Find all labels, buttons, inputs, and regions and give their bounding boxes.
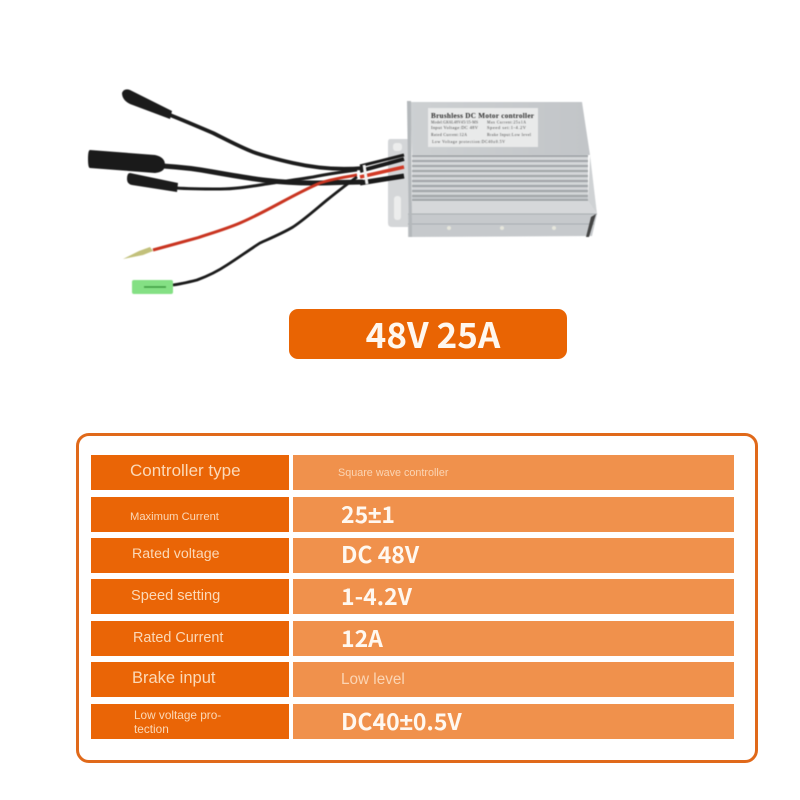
value: 1-4.2V [293, 579, 734, 614]
row: Low voltage protection: tection [134, 722, 169, 736]
banner: 48V 25A: 48V 25A [366, 308, 500, 359]
row: Low voltage protection: Low voltage pro- [134, 708, 221, 722]
icon: lower connector cable [127, 170, 357, 192]
icon: cable bundle entering controller [360, 155, 404, 184]
spec label on housing: Max Current:25±1A [487, 120, 526, 124]
spec label on housing: Low Voltage protection:DC40±0.5V [432, 139, 505, 144]
spec label on housing [428, 108, 538, 147]
spec label on housing: Brushless DC Motor controller [431, 112, 535, 120]
value: DC 48V: DC 48V [341, 536, 419, 570]
row: Controller type [91, 455, 289, 490]
value: Square wave controller [293, 455, 734, 490]
row: Rated voltage [91, 538, 289, 573]
row: Maximum Current: Maximum Current [130, 511, 219, 523]
banner: 48V 25A [289, 309, 567, 359]
row: Brake input: Brake input [132, 669, 215, 687]
value: 12A: 12A [341, 620, 383, 654]
spec label on housing: Brake Input:Low level [487, 132, 532, 137]
row: Controller type: Controller type [130, 461, 241, 480]
row: Rated voltage: Rated voltage [132, 546, 220, 562]
icon: black wire with green connector [132, 177, 357, 294]
icon: middle connector cable [88, 150, 363, 183]
icon: top connector cable [122, 89, 363, 169]
value: 25±1: 25±1 [341, 496, 395, 530]
value: DC 48V [293, 538, 734, 573]
value: 1-4.2V: 1-4.2V [341, 578, 412, 612]
icon: controller housing [407, 101, 597, 237]
row: Rated Current [91, 621, 289, 656]
value: 12A [293, 621, 734, 656]
spec label on housing: Input Voltage:DC 48V [431, 125, 479, 130]
value: Low level: Low level [341, 671, 405, 688]
icon: mounting bracket [388, 139, 410, 227]
row: Low voltage protection [91, 704, 289, 739]
spec label on housing: Speed set:1-4.2V [487, 125, 527, 130]
row: Speed setting [91, 579, 289, 614]
row: Maximum Current [91, 497, 289, 532]
value: DC40±0.5V [293, 704, 734, 739]
row: Rated Current: Rated Current [133, 630, 223, 646]
spec label on housing: Rated Current:12A [431, 132, 467, 137]
panel: specification table frame [76, 433, 758, 763]
icon: red wire with terminal [123, 175, 357, 259]
row: Speed setting: Speed setting [131, 588, 220, 604]
value: DC40±0.5V: DC40±0.5V [341, 703, 462, 737]
value: 25±1 [293, 497, 734, 532]
value: Low level [293, 662, 734, 697]
value: Square wave controller: Square wave controller [338, 467, 448, 479]
row: Brake input [91, 662, 289, 697]
spec label on housing: Model:GK6L48V45/15-MS [431, 120, 478, 124]
